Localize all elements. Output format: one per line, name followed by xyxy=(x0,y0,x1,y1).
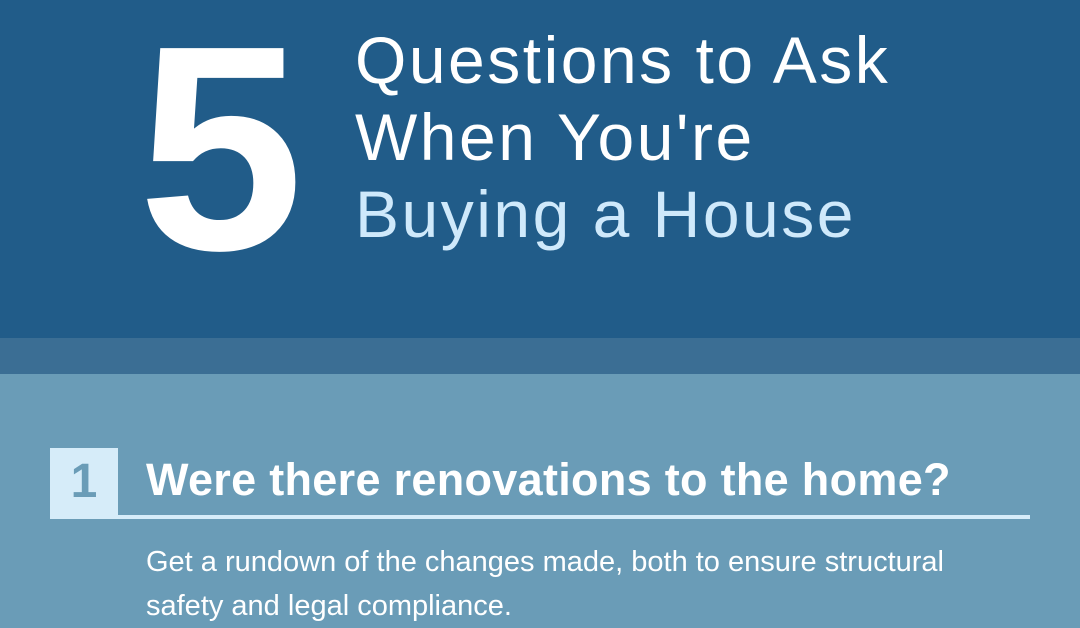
title: When You're xyxy=(355,100,755,174)
title: Buying a House xyxy=(355,177,856,251)
band xyxy=(0,338,1080,374)
header panel xyxy=(0,0,1080,338)
title: Questions to Ask xyxy=(355,23,890,97)
question heading: Were there renovations to the home? xyxy=(146,454,951,505)
title xyxy=(355,23,890,251)
question 1 section xyxy=(50,448,1030,622)
answer text: Get a rundown of the changes made, both to ensure structural safety and legal compliance. xyxy=(146,546,944,622)
number box: 1 xyxy=(71,455,97,508)
number box xyxy=(50,448,118,516)
underline xyxy=(50,515,1030,519)
